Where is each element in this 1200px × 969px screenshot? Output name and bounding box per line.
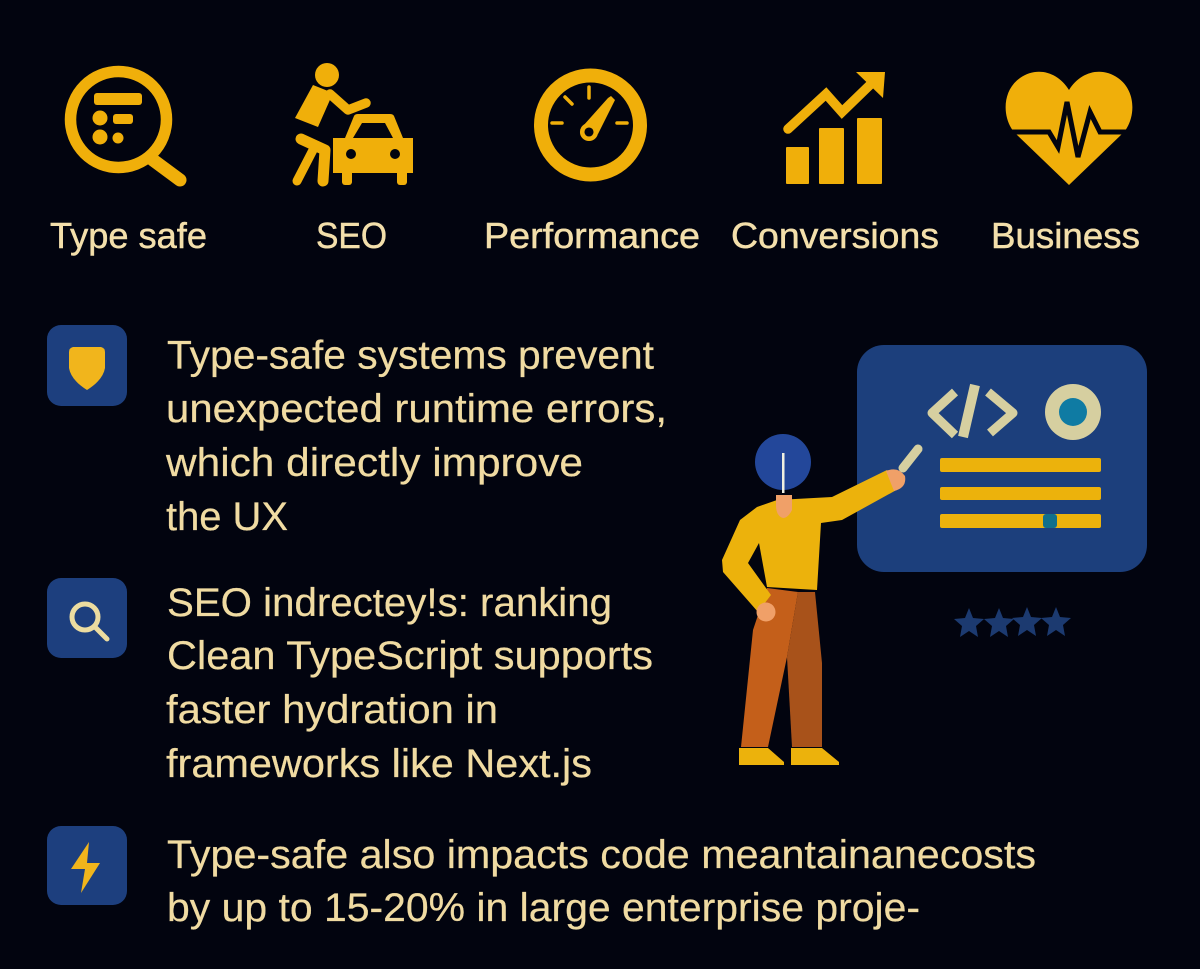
icon: shield badge (47, 325, 127, 406)
text block: type-safe systems: which directly improve (165, 441, 583, 485)
icon: search badge (47, 578, 127, 658)
text block: type-safe systems (165, 334, 667, 539)
text block: SEO indirectly: frameworks like Next.js (166, 742, 592, 786)
text block: SEO indirectly: SEO indrectey!s: ranking (167, 581, 612, 625)
icon: code brackets (932, 385, 1013, 437)
text block: SEO indirectly (166, 581, 653, 786)
label: Performance: Performance (484, 215, 700, 256)
text block: SEO indirectly: faster hydration in (166, 688, 498, 732)
label: SEO: SEO (316, 215, 387, 256)
text block: type-safe systems: Type-safe systems prevent (167, 334, 654, 378)
icon: ring (1045, 384, 1101, 440)
text block: type-safe systems: the UX (166, 495, 288, 539)
icon: rising bar chart (786, 72, 885, 184)
icon: heart with pulse (1003, 72, 1135, 185)
illustration: rating stars (954, 607, 1071, 637)
icon: magnifier with type symbols (70, 72, 180, 180)
text block: maintenance costs: by up to 15-20% in large enterprise proje- (167, 886, 920, 930)
text block: type-safe systems: unexpected runtime errors, (166, 387, 667, 431)
illustration: presenter figure (722, 434, 918, 765)
icon: person pushing car (295, 63, 413, 185)
icon: lightning badge (47, 826, 127, 905)
label: Business: Business (991, 215, 1140, 256)
text block: maintenance costs: Type-safe also impacts code meantainanecosts (167, 833, 1036, 877)
icon: performance gauge (541, 76, 640, 174)
label: Conversions: Conversions (731, 215, 939, 256)
label: Type safe: Type safe (50, 215, 207, 256)
text lines (940, 458, 1101, 528)
text block: maintenance costs (167, 833, 1036, 930)
illustration: code board (857, 345, 1147, 572)
text block: SEO indirectly: Clean TypeScript supports (167, 634, 653, 678)
